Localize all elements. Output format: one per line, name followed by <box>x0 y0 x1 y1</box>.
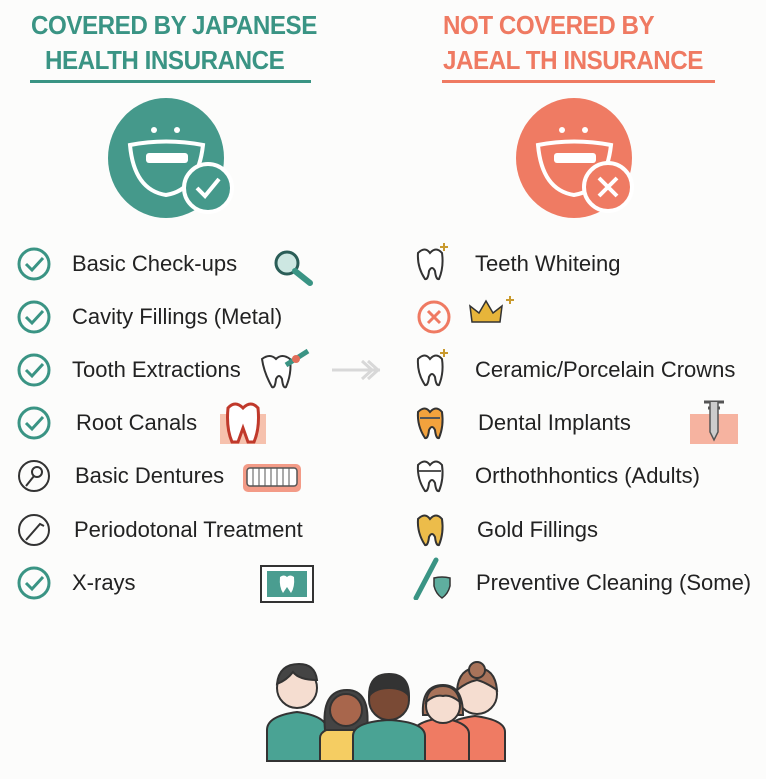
list: covered <box>18 248 314 603</box>
list: not covered: Orthothhontics (Adults) <box>475 463 700 488</box>
item: dentures <box>18 460 224 492</box>
list: covered: Periodotonal Treatment <box>74 517 303 542</box>
item: root canals <box>18 406 197 440</box>
item: xrays <box>18 566 136 600</box>
item: implants <box>416 408 631 440</box>
list: covered: X-rays <box>72 570 136 595</box>
title: covered <box>31 10 317 75</box>
arrow <box>332 360 380 380</box>
icon: happy face teal with check <box>108 98 230 218</box>
list: covered: Tooth Extractions <box>72 357 241 382</box>
item: fillings <box>18 300 282 334</box>
list: covered: Root Canals <box>76 410 197 435</box>
item: check-ups <box>18 248 237 280</box>
list: not covered: Preventive Cleaning (Some) <box>476 570 751 595</box>
divider left <box>30 80 311 83</box>
list: covered: Basic Dentures <box>75 463 224 488</box>
item: extractions <box>18 354 241 386</box>
list: covered: Cavity Fillings (Metal) <box>72 304 282 329</box>
title: not covered <box>443 10 703 75</box>
item: gold fillings <box>416 514 598 546</box>
illustration: group of people <box>266 661 506 762</box>
list: not covered: Ceramic/Porcelain Crowns <box>475 357 735 382</box>
title: covered: HEALTH INSURANCE <box>45 45 284 75</box>
list: not covered <box>414 243 751 600</box>
icon: happy face salmon with x <box>516 98 632 218</box>
title: not covered: NOT COVERED BY <box>443 10 654 40</box>
list: not covered: Teeth Whiteing <box>475 251 621 276</box>
item: whitening <box>416 243 621 280</box>
list: not covered: Gold Fillings <box>477 517 598 542</box>
item: periodontal <box>18 514 303 546</box>
list: covered: Basic Check-ups <box>72 251 237 276</box>
item: orthodontics <box>416 460 700 492</box>
title: covered: COVERED BY JAPANESE <box>31 10 317 40</box>
item: cleaning <box>414 558 751 600</box>
item: crown icon <box>418 296 514 334</box>
item: crowns <box>416 349 735 386</box>
title: not covered: JAEAL TH INSURANCE <box>443 45 703 75</box>
list: not covered: Dental Implants <box>478 410 631 435</box>
